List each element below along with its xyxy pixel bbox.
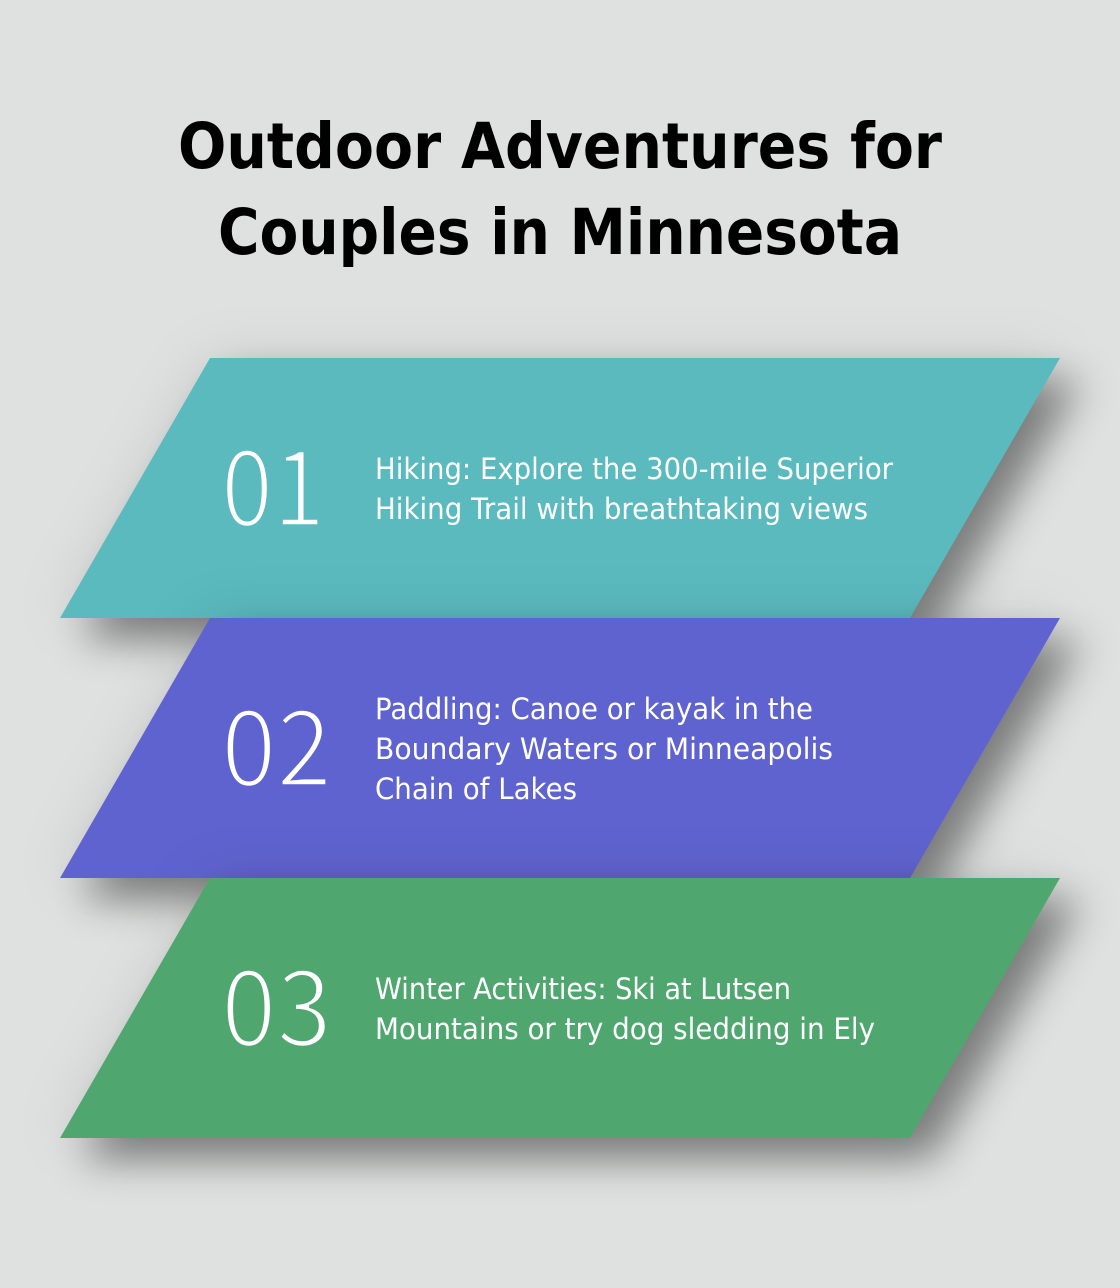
number 01: 01 bbox=[221, 403, 325, 557]
title: Couples in Minnesota bbox=[218, 196, 902, 269]
number 03: 03 bbox=[221, 923, 332, 1077]
green parallelogram bbox=[60, 878, 1060, 1138]
text: paddling bbox=[375, 692, 833, 806]
text: winter activities: Winter Activities: Ski at Lutsen bbox=[375, 972, 791, 1006]
text: hiking: Hiking: Explore the 300-mile Superior bbox=[375, 452, 893, 486]
text: hiking: Hiking Trail with breathtaking views bbox=[375, 492, 868, 526]
number 02: 02 bbox=[221, 663, 332, 817]
panel: winter activities bbox=[60, 878, 1060, 1138]
text: paddling: Boundary Waters or Minneapolis bbox=[375, 732, 833, 766]
panel: hiking bbox=[60, 358, 1060, 618]
text: hiking bbox=[375, 452, 893, 526]
panel: paddling bbox=[60, 618, 1060, 878]
text: paddling: Chain of Lakes bbox=[375, 772, 577, 806]
teal parallelogram bbox=[60, 358, 1060, 618]
title bbox=[178, 110, 942, 269]
text: paddling: Paddling: Canoe or kayak in the bbox=[375, 692, 813, 726]
text: winter activities bbox=[375, 972, 875, 1046]
purple parallelogram bbox=[60, 618, 1060, 878]
title: Outdoor Adventures for bbox=[178, 110, 942, 183]
text: winter activities: Mountains or try dog sledding in Ely bbox=[375, 1012, 875, 1046]
